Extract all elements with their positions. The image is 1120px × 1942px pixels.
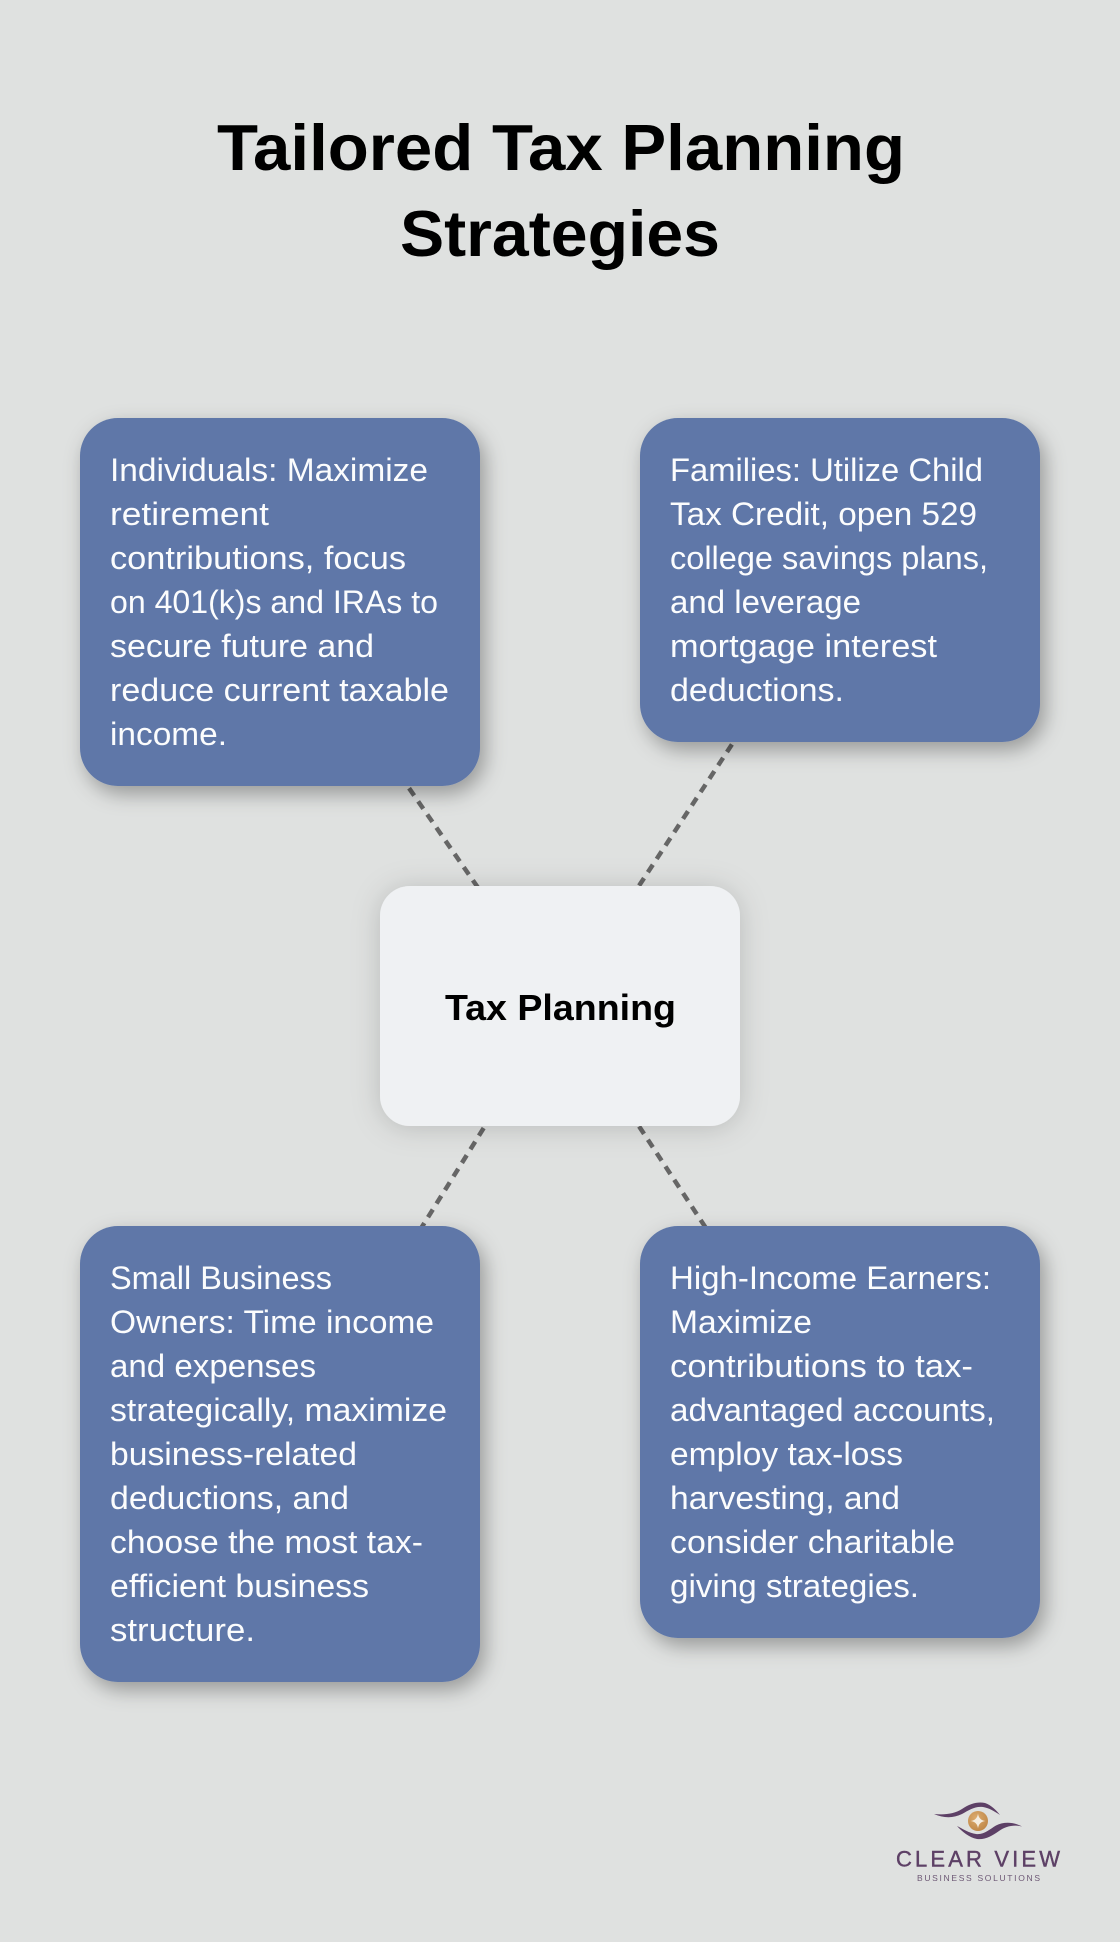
panel: families: and leverage	[670, 584, 861, 620]
panel: small business owners	[80, 1226, 480, 1682]
connector: small business owners to center	[280, 1006, 560, 1454]
panel: small business owners: strategically, maximize	[110, 1392, 447, 1428]
panel: high-income earners: giving strategies.	[670, 1568, 919, 1604]
panel: high-income earners: High-Income Earners:	[670, 1260, 991, 1296]
connector: high-income earners to center	[560, 1006, 840, 1432]
panel: high-income earners: consider charitable	[670, 1524, 955, 1560]
panel: families: college savings plans,	[670, 540, 988, 576]
logo: clear view business solutions	[896, 1803, 1060, 1883]
panel: families	[640, 418, 1040, 742]
panel: high-income earners: employ tax-loss	[670, 1436, 903, 1472]
panel: high-income earners	[640, 1226, 1040, 1638]
panel: small business owners: efficient business	[110, 1568, 369, 1604]
panel: small business owners: choose the most tax-	[110, 1524, 423, 1560]
panel: small business owners: and expenses	[110, 1348, 316, 1384]
panel: center tax planning: Tax Planning	[445, 987, 676, 1028]
panel: individuals: Individuals: Maximize	[110, 452, 428, 488]
panel: small business owners: Small Business	[110, 1260, 332, 1296]
panel: high-income earners: advantaged accounts,	[670, 1392, 995, 1428]
panel: individuals: reduce current taxable	[110, 672, 449, 708]
panel: families: mortgage interest	[670, 628, 937, 664]
panel: high-income earners: Maximize	[670, 1304, 812, 1340]
panel: individuals: retirement	[110, 496, 269, 532]
panel: small business owners: structure.	[110, 1612, 255, 1648]
panel: small business owners: Owners: Time income	[110, 1304, 434, 1340]
icon: eye swooshes and star	[934, 1803, 1022, 1839]
title: Tailored Tax Planning	[217, 111, 905, 184]
panel: high-income earners: harvesting, and	[670, 1480, 900, 1516]
panel: small business owners: business-related	[110, 1436, 357, 1472]
panel: high-income earners: contributions to tax-	[670, 1348, 973, 1384]
panel: individuals: secure future and	[110, 628, 374, 664]
logo tagline: BUSINESS SOLUTIONS	[917, 1873, 1040, 1883]
logo wordmark: CLEAR VIEW	[896, 1846, 1060, 1872]
panel: individuals: contributions, focus	[110, 540, 406, 576]
panel: families: Families: Utilize Child	[670, 452, 983, 488]
title: Strategies	[400, 197, 720, 270]
panel: individuals	[80, 418, 480, 786]
panel: individuals: income.	[110, 716, 227, 752]
connector: families to center	[560, 580, 840, 1006]
title	[217, 111, 905, 270]
panel: individuals: on 401(k)s and IRAs to	[110, 584, 438, 620]
connector: individuals to center	[280, 602, 560, 1006]
panel: families: deductions.	[670, 672, 844, 708]
panel: families: Tax Credit, open 529	[670, 496, 977, 532]
panel: small business owners: deductions, and	[110, 1480, 349, 1516]
panel: center tax planning	[380, 886, 740, 1126]
